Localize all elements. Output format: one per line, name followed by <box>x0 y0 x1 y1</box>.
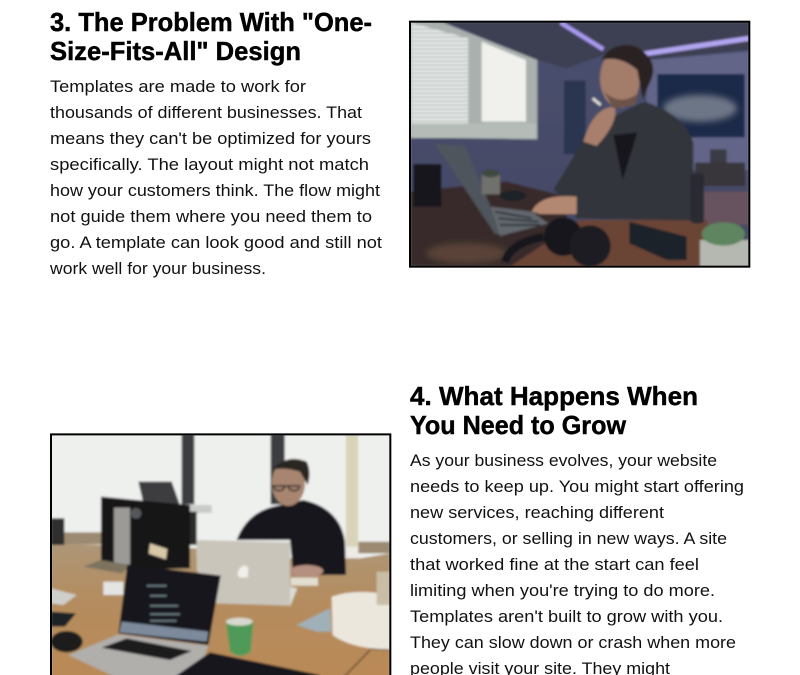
section 3 heading: 3. The Problem With "One- <box>50 7 372 37</box>
section 3 body text: not guide them where you need them to <box>50 207 372 226</box>
section 4 body text: As your business evolves, your website <box>410 451 717 470</box>
section 4 body text: Templates aren't built to grow with you. <box>410 607 723 626</box>
photo: man thinking at a laptop in a purple-lit office <box>410 22 749 267</box>
section 3 body text: thousands of different businesses. That <box>50 103 362 122</box>
section 4 body text <box>410 451 744 675</box>
photo: people working at a shared table with laptops <box>51 434 390 675</box>
section 4 body text: customers, or selling in new ways. A site <box>410 529 727 548</box>
section 3 body text: work well for your business. <box>49 259 266 278</box>
section 4 body text: They can slow down or crash when more <box>410 633 736 652</box>
section 3 heading: Size-Fits-All" Design <box>50 36 301 66</box>
section 4 heading <box>410 381 698 440</box>
section 4 body text: needs to keep up. You might start offering <box>410 477 744 496</box>
section 3 body text: how your customers think. The flow might <box>50 181 380 200</box>
section 3 body text: go. A template can look good and still not <box>50 233 382 252</box>
section 4 body text: new services, reaching different <box>410 503 664 522</box>
section 3 body text <box>49 77 382 278</box>
section 4 heading: You Need to Grow <box>410 410 627 440</box>
section 4 body text: limiting when you're trying to do more. <box>410 581 715 600</box>
section 4 body text: that worked fine at the start can feel <box>410 555 699 574</box>
section 3 body text: Templates are made to work for <box>50 77 306 96</box>
section 4 heading: 4. What Happens When <box>410 381 698 411</box>
section 3 body text: specifically. The layout might not match <box>50 155 369 174</box>
section 3 heading <box>50 7 372 66</box>
section 3 body text: means they can't be optimized for yours <box>50 129 371 148</box>
